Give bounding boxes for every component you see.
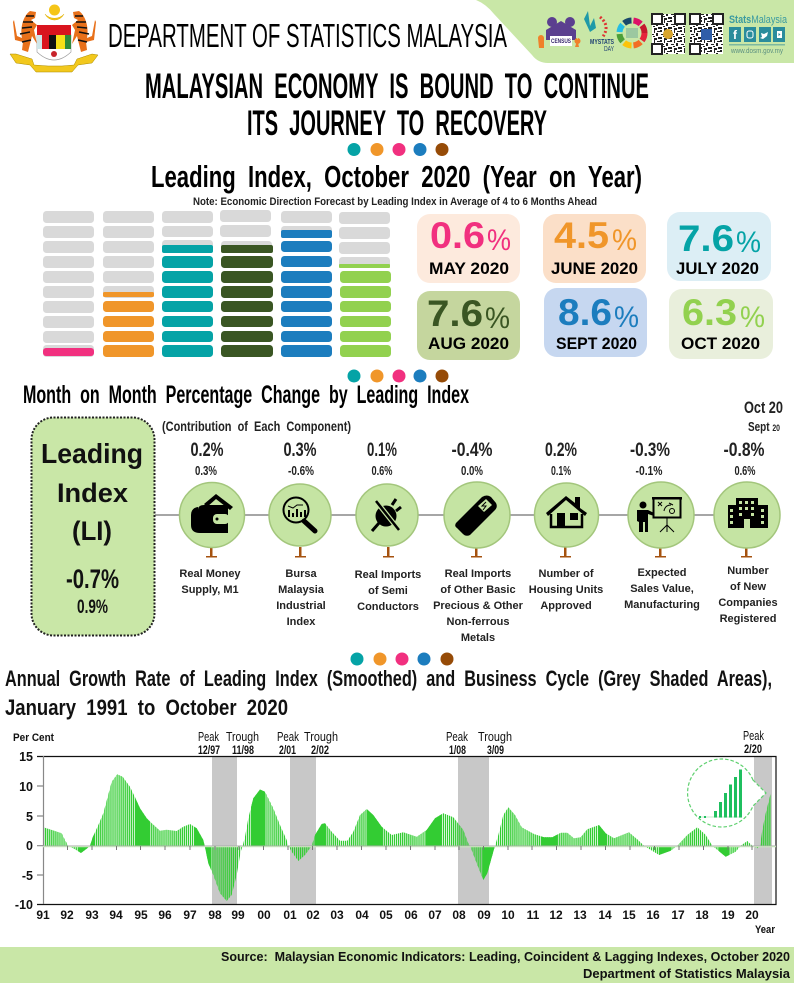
x axis labels: 01 — [283, 908, 297, 922]
x axis labels: 10 — [501, 908, 515, 922]
card: June 2020: 4.5 — [554, 215, 609, 256]
component: other basic metals: Precious & Other — [433, 600, 524, 612]
green bars series — [44, 774, 771, 901]
main title: ITS JOURNEY TO RECOVERY — [247, 104, 547, 143]
icon: national crest — [10, 4, 98, 72]
component: real imports of semi conductors: 0.6% — [372, 463, 393, 478]
card: Aug 2020: 7.6 — [427, 293, 483, 334]
gauge: August — [220, 210, 273, 357]
icon: SDG wheel — [620, 20, 644, 46]
source text: Department of Statistics Malaysia — [583, 966, 791, 981]
x axis labels: 99 — [231, 908, 245, 922]
component: bursa malaysia: Bursa — [285, 568, 317, 580]
x axis labels: 11 — [527, 908, 540, 922]
peak and trough labels: 2/20 — [744, 742, 762, 756]
gauge: July — [162, 211, 213, 357]
coloured dots row three — [350, 652, 454, 666]
StatsMalaysia social block: f — [733, 28, 738, 42]
y axis labels: -10 — [15, 898, 33, 912]
gauge: May — [43, 211, 94, 357]
component: real money supply — [179, 440, 244, 596]
x axis labels: 97 — [183, 908, 197, 922]
component: bursa malaysia — [269, 440, 331, 628]
x axis labels: 91 — [36, 908, 50, 922]
gauge: October — [339, 212, 391, 357]
footer band — [0, 947, 794, 983]
icon: metal bar — [455, 496, 497, 536]
component: real money supply: 0.2% — [190, 440, 224, 461]
component: expected sales value: Expected — [638, 567, 686, 579]
component: new companies: Registered — [720, 613, 776, 625]
card: May 2020: % — [487, 224, 511, 257]
logos strip — [538, 11, 788, 55]
icon: QR code one — [652, 14, 685, 54]
peak and trough labels: 2/02 — [311, 743, 329, 757]
x axis labels: 17 — [671, 908, 685, 922]
panel: leading index box: Index — [57, 478, 128, 508]
x axis labels: 16 — [646, 908, 660, 922]
main title — [145, 67, 649, 143]
x axis labels: 08 — [452, 908, 466, 922]
component: expected sales value — [624, 440, 700, 611]
x axis labels: 07 — [428, 908, 442, 922]
component: housing units — [529, 440, 603, 612]
panel: leading index box — [32, 418, 154, 636]
y axis labels: -5 — [22, 869, 33, 883]
x axis labels: 96 — [158, 908, 172, 922]
icon: mystats day logo: DAY — [604, 46, 614, 53]
component: housing units: Housing Units — [529, 584, 603, 596]
x axis labels: 18 — [695, 908, 709, 922]
coloured dots row two — [348, 370, 448, 382]
axis title: per cent: Per Cent — [13, 732, 54, 744]
card: June 2020: JUNE 2020 — [551, 259, 638, 278]
panel: leading index box: 0.9% — [77, 597, 108, 618]
component: other basic metals: Metals — [461, 632, 495, 644]
component: real money supply: Supply, M1 — [181, 584, 239, 596]
x axis labels: 04 — [355, 908, 369, 922]
x axis labels: 14 — [598, 908, 612, 922]
header green band — [476, 0, 794, 63]
x axis labels: 93 — [85, 908, 99, 922]
component: real imports of semi conductors: of Semi — [368, 585, 408, 597]
card: July 2020: JULY 2020 — [676, 259, 759, 278]
icon: mystats day logo — [584, 11, 614, 53]
icon: presenter with board — [637, 497, 682, 532]
component: bursa malaysia: 0.3% — [284, 440, 317, 461]
component: bursa malaysia: Industrial — [276, 600, 326, 612]
y axis labels: 0 — [26, 839, 33, 853]
component: real money supply: 0.3% — [195, 463, 217, 478]
component: new companies: of New — [730, 581, 766, 593]
component: bursa malaysia: Malaysia — [278, 584, 325, 596]
component: expected sales value: Manufacturing — [624, 599, 700, 611]
card: Aug 2020 — [417, 291, 520, 360]
card: Sept 2020 — [544, 288, 647, 357]
icon: mystats day logo: MYSTATS — [590, 39, 614, 46]
card: July 2020 — [667, 212, 771, 281]
component: other basic metals: Non-ferrous — [447, 616, 509, 628]
x axis labels: 13 — [573, 908, 587, 922]
component: other basic metals — [433, 440, 524, 644]
icon: house — [546, 496, 587, 527]
x axis labels: 00 — [257, 908, 271, 922]
peak and trough labels: Peak — [446, 729, 468, 744]
y axis labels: 10 — [19, 780, 33, 794]
heading: month on month: Month on Month Percentage Change by Leading Index — [23, 381, 469, 409]
gauge bars — [43, 210, 391, 357]
y axis labels: 15 — [19, 750, 33, 764]
component: real imports of semi conductors: 0.1% — [367, 440, 397, 461]
subheading: contribution: (Contribution of Each Component) — [162, 418, 351, 434]
component: housing units: Approved — [540, 600, 592, 612]
card: Aug 2020: % — [485, 302, 510, 335]
y axis labels — [15, 750, 33, 912]
peak and trough labels: 12/97 — [198, 743, 220, 757]
component: expected sales value: -0.1% — [636, 463, 663, 478]
card: May 2020: 0.6 — [430, 215, 485, 256]
legend: Oct 20 / Sept 20: Sept 20 — [748, 419, 780, 434]
icon: census logo: CENSUS — [551, 39, 571, 45]
component: new companies — [714, 440, 780, 625]
StatsMalaysia social block: StatsMalaysia — [729, 14, 788, 26]
card: July 2020: 7.6 — [678, 218, 734, 259]
y axis labels: 5 — [26, 810, 33, 824]
peak and trough labels: 2/01 — [279, 743, 296, 757]
peak and trough labels: Trough — [478, 729, 512, 744]
component: new companies: -0.8% — [724, 440, 765, 461]
component: real money supply: Real Money — [179, 568, 241, 580]
card: Oct 2020: % — [740, 301, 765, 334]
card: July 2020: % — [736, 226, 761, 259]
card: Oct 2020 — [669, 289, 773, 359]
component: housing units: 0.1% — [551, 463, 571, 478]
header title: DEPARTMENT OF STATISTICS MALAYSIA — [108, 17, 507, 54]
icon: office buildings — [728, 498, 768, 528]
icon: crossed plug — [372, 499, 401, 531]
x axis labels: 02 — [306, 908, 320, 922]
component: real imports of semi conductors: Real Imports — [355, 569, 421, 581]
x axis labels — [36, 908, 759, 922]
x axis labels: 92 — [60, 908, 74, 922]
component: expected sales value: Sales Value, — [630, 583, 694, 595]
peak and trough labels: Peak — [743, 728, 764, 743]
x axis labels: 06 — [404, 908, 418, 922]
x axis labels: 20 — [745, 908, 759, 922]
component: real imports of semi conductors: Conductors — [357, 601, 419, 613]
icon: census logo — [538, 17, 580, 48]
x axis labels: 15 — [622, 908, 636, 922]
x axis labels: 95 — [134, 908, 148, 922]
connector line — [155, 514, 745, 516]
source text: Source: Malaysian Economic Indicators: Leading, Coincident & Lagging Indexes, October 2020 — [221, 949, 790, 964]
x axis labels: 12 — [549, 908, 563, 922]
card: June 2020: % — [612, 224, 637, 257]
component: housing units: 0.2% — [545, 440, 577, 461]
peak and trough labels: Peak — [277, 729, 299, 744]
panel: leading index box: -0.7% — [66, 564, 119, 594]
icon: magnifier chart — [284, 498, 315, 531]
card: May 2020: MAY 2020 — [429, 259, 509, 278]
peak and trough labels: Trough — [226, 729, 259, 744]
chart: annual growth rate — [13, 728, 776, 936]
card: May 2020 — [417, 214, 520, 283]
card: June 2020 — [543, 214, 646, 283]
component: new companies: Companies — [718, 597, 778, 609]
card: Oct 2020: OCT 2020 — [681, 334, 760, 353]
peak and trough labels: Peak — [198, 729, 219, 744]
source text — [221, 949, 791, 981]
coloured dots row one — [348, 143, 448, 156]
card: Oct 2020: 6.3 — [682, 292, 737, 333]
axis title: year: Year — [755, 924, 776, 936]
component: other basic metals: -0.4% — [452, 440, 493, 461]
peak and trough labels: 3/09 — [487, 743, 504, 757]
panel: leading index box: Leading — [41, 438, 143, 469]
card: Aug 2020: AUG 2020 — [428, 334, 509, 353]
heading: annual growth: January 1991 to October 2020 — [5, 695, 288, 720]
component: bursa malaysia: -0.6% — [288, 463, 314, 478]
peak and trough labels: Trough — [304, 729, 338, 744]
component: other basic metals: of Other Basic — [440, 584, 516, 596]
x axis labels: 03 — [330, 908, 344, 922]
note text: Note: Economic Direction Forecast by Leading Index in Average of 4 to 6 Months Ahead — [193, 196, 597, 208]
peak and trough labels: 11/98 — [232, 743, 254, 757]
card: Sept 2020: 8.6 — [558, 292, 612, 333]
x axis labels: 94 — [109, 908, 123, 922]
heading: annual growth — [5, 666, 772, 720]
icon: QR code two — [690, 14, 723, 54]
card: Sept 2020: SEPT 2020 — [556, 334, 637, 353]
StatsMalaysia social block — [729, 14, 788, 55]
component: other basic metals: Real Imports — [445, 568, 511, 580]
StatsMalaysia social block: www.dosm.gov.my — [730, 48, 783, 55]
component: new companies: Number — [727, 565, 769, 577]
component: expected sales value: -0.3% — [630, 440, 670, 461]
peak and trough labels: 1/08 — [449, 743, 466, 757]
gauge: June — [103, 211, 154, 357]
business cycle shaded areas — [212, 756, 772, 904]
panel: leading index box: (LI) — [72, 516, 112, 546]
gauge: September — [281, 211, 332, 357]
component: real imports of semi conductors — [355, 440, 421, 613]
x axis labels: 98 — [208, 908, 222, 922]
peak and trough labels — [198, 728, 764, 757]
card: Sept 2020: % — [614, 301, 639, 334]
component: housing units: Number of — [538, 568, 594, 580]
x axis labels: 09 — [477, 908, 491, 922]
x axis labels: 05 — [379, 908, 393, 922]
x axis labels: 19 — [721, 908, 735, 922]
callout: recent growth zoom — [688, 759, 766, 827]
chart frame and axes — [37, 756, 776, 904]
component: new companies: 0.6% — [734, 463, 756, 478]
icon: wallet — [191, 494, 233, 533]
component: other basic metals: 0.0% — [461, 463, 483, 478]
component: bursa malaysia: Index — [287, 616, 316, 628]
legend: Oct 20 / Sept 20 — [744, 398, 783, 434]
